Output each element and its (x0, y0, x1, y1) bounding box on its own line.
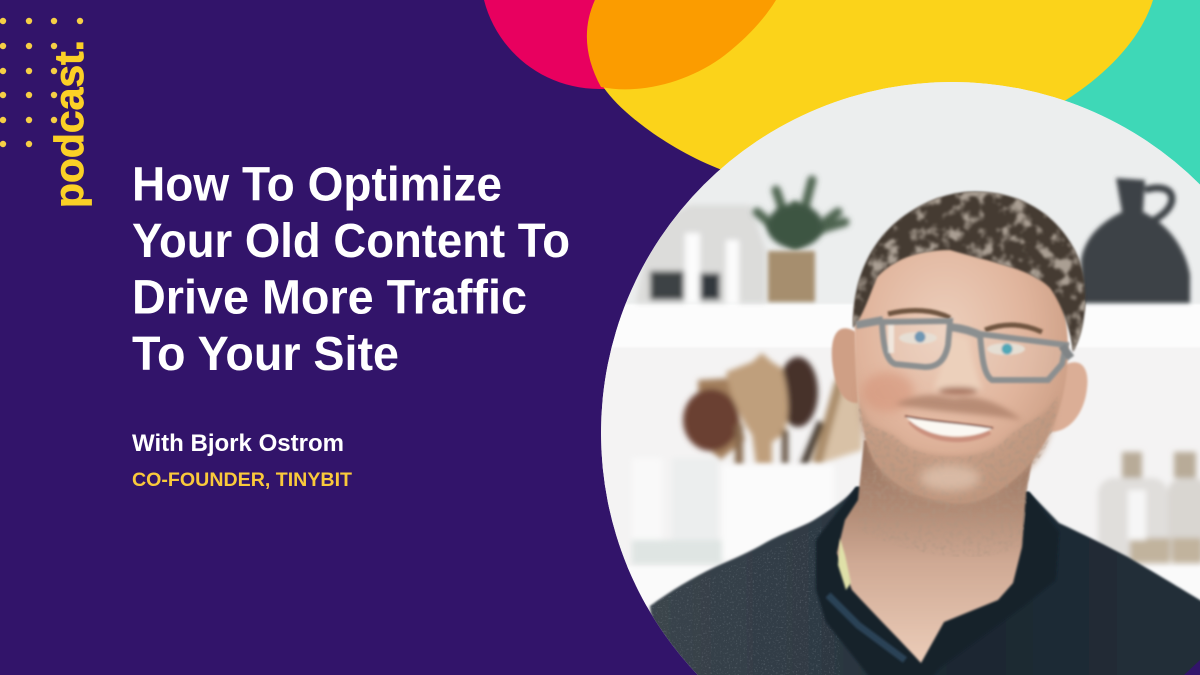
neck stubble (874, 471, 1030, 556)
face (855, 234, 1068, 503)
jug (1081, 178, 1190, 303)
shape: teal blob (1040, 0, 1200, 200)
moustache shadow (895, 395, 1022, 420)
shirt texture (650, 518, 840, 675)
eye right (987, 343, 1025, 355)
white cup and glasses (632, 458, 834, 564)
title: Your Old Content To (132, 215, 570, 268)
shape: yellow blob (587, 0, 1153, 170)
nose (936, 345, 981, 398)
collar placket (828, 595, 905, 660)
title: How To Optimize (132, 158, 502, 212)
eyebrows (888, 311, 1042, 332)
chin light (920, 465, 980, 491)
hair (853, 192, 1085, 352)
title: Drive More Traffic (132, 272, 527, 324)
kitchen shelves and objects (590, 70, 1200, 606)
label: podcast: podcast. (46, 40, 92, 208)
eye left (899, 332, 937, 344)
shape: pink blob (484, 0, 640, 89)
title (132, 158, 570, 381)
utensils (683, 350, 862, 465)
person (650, 192, 1200, 675)
undershirt sliver (838, 538, 851, 590)
decoration: dot grid (0, 18, 83, 147)
glass jars (636, 205, 766, 304)
jars right (1098, 452, 1200, 563)
hair texture (853, 192, 1085, 352)
shape: orange overlap (587, 0, 776, 89)
collar (816, 487, 1059, 675)
beard base (857, 404, 1056, 502)
neck (837, 440, 1036, 663)
guest name: With Bjork Ostrom (132, 430, 344, 457)
title: To Your Site (132, 328, 399, 381)
photo: host portrait in circle (590, 70, 1200, 675)
shape: purple corner at photo edge (1184, 660, 1200, 675)
smile (905, 416, 993, 440)
glasses (856, 320, 1071, 380)
beard stubble (858, 408, 1056, 489)
guest role: CO-FOUNDER, TINYBIT (132, 470, 352, 491)
shirt (650, 487, 1200, 675)
cheek blush (862, 372, 914, 412)
right ear (1050, 362, 1087, 432)
left ear (832, 328, 858, 403)
photo background wall (590, 70, 1200, 675)
plant (757, 180, 845, 302)
